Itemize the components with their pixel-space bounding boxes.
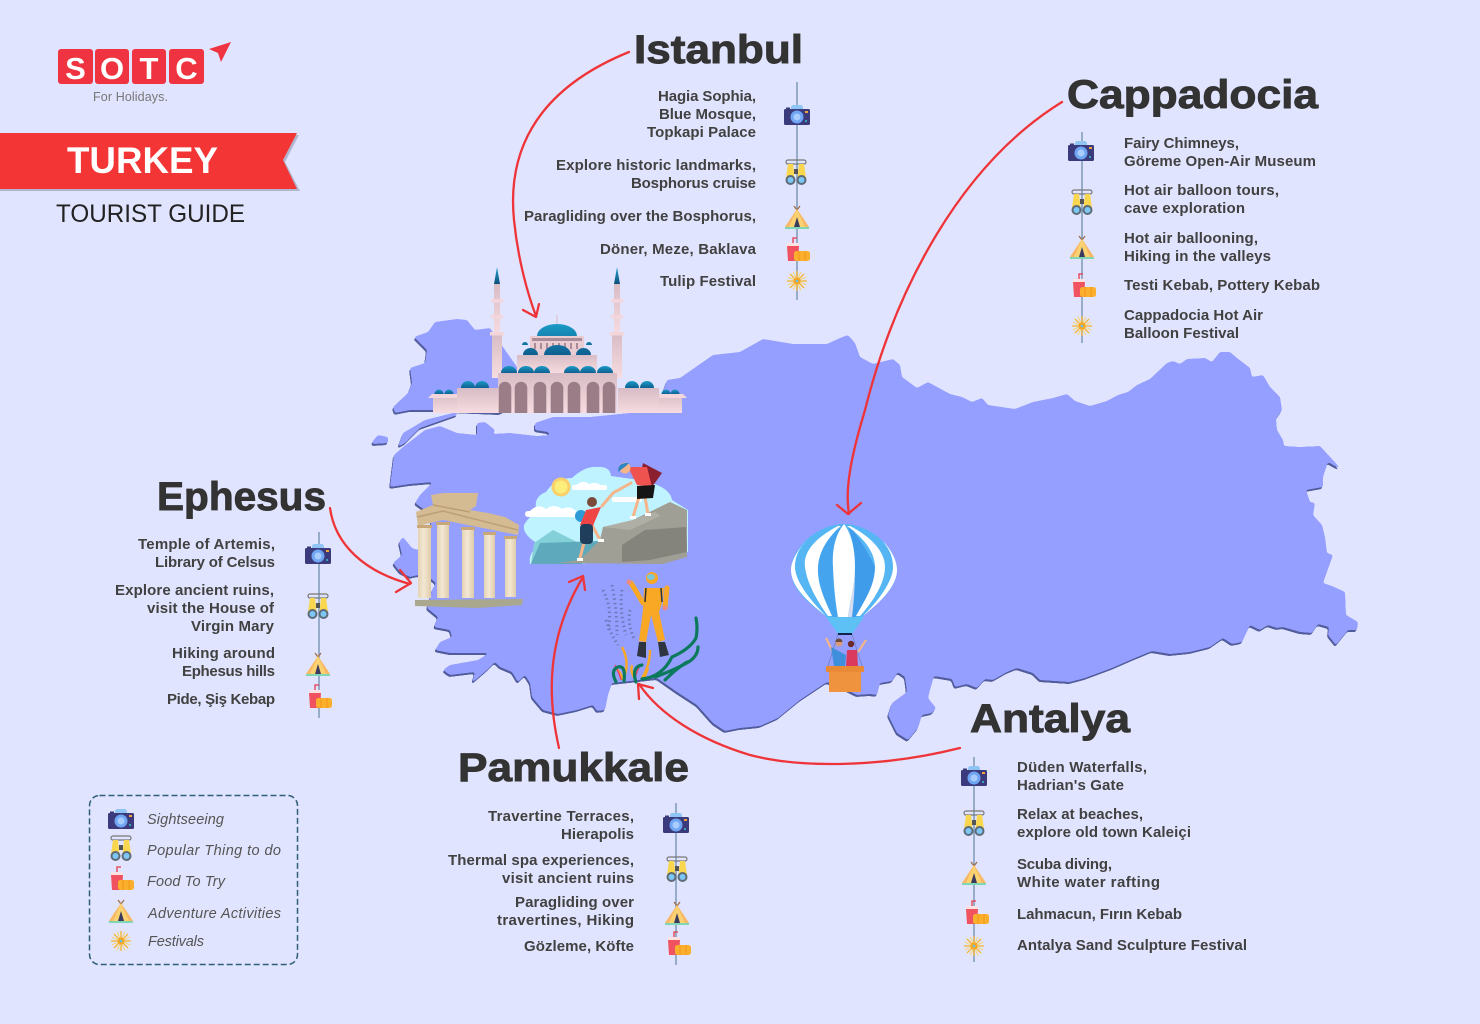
panel: Antalya <box>961 697 1247 962</box>
text: Istanbul details: Paragliding over the Bosphorus, <box>524 208 756 225</box>
subtitle: tourist guide: TOURIST GUIDE <box>56 200 245 228</box>
icon: tent <box>665 902 689 925</box>
text: Antalya details: Lahmacun, Fırın Kebab <box>1017 906 1182 923</box>
icon: camera <box>663 813 689 833</box>
text: Pamukkale details: Hierapolis <box>561 826 634 843</box>
text: Cappadocia details: Cappadocia Hot Air <box>1124 307 1263 324</box>
text: Antalya details: explore old town Kaleiçi <box>1017 824 1191 841</box>
text: Ephesus details: Pide, Şiş Kebap <box>167 691 275 708</box>
icon: food <box>668 932 691 955</box>
legend icon: festival <box>112 932 130 950</box>
panel: Pamukkale <box>448 746 691 965</box>
arrow: Antalya to diver <box>638 684 960 764</box>
icon: binoculars <box>964 811 984 836</box>
text: Istanbul details: Tulip Festival <box>660 273 756 290</box>
text: Antalya details: Düden Waterfalls, <box>1017 759 1147 776</box>
text: Cappadocia details: Hot air balloon tours, <box>1124 182 1279 199</box>
legend icon: camera <box>108 809 134 829</box>
icon: food <box>309 685 332 708</box>
timeline <box>1081 132 1083 343</box>
icon: camera <box>1068 141 1094 161</box>
text: Pamukkale details: Thermal spa experiences, <box>448 852 634 869</box>
logo: SOTC For Holidays <box>58 42 231 104</box>
heading: Antalya: Antalya <box>970 697 1131 741</box>
text: Cappadocia details: Göreme Open-Air Museum <box>1124 153 1316 170</box>
icon: tent <box>1070 236 1094 259</box>
text: Pamukkale details: travertines, Hiking <box>497 912 634 929</box>
icon: camera <box>961 766 987 786</box>
logo: SOTC For Holidays: S <box>65 51 86 86</box>
text: Antalya details <box>1017 759 1247 954</box>
illustration: mosque <box>428 267 687 413</box>
legend <box>90 796 298 964</box>
icon: binoculars <box>786 160 806 185</box>
arrow: Pamukkale to hikers <box>552 576 585 748</box>
text: Ephesus details: Hiking around <box>172 645 275 662</box>
legend label: popular thing to do: Popular Thing to do <box>147 843 281 859</box>
icon: camera <box>784 105 810 125</box>
title banner: Turkey <box>0 133 300 191</box>
arrow: Istanbul to mosque <box>513 52 629 317</box>
icon: tent <box>785 206 809 229</box>
icon: festival <box>788 272 806 290</box>
text: Ephesus details: Ephesus hills <box>182 663 275 680</box>
text: Cappadocia details: cave exploration <box>1124 200 1245 217</box>
text: Ephesus details: Explore ancient ruins, <box>115 582 274 599</box>
timeline <box>973 757 975 962</box>
text: Istanbul details <box>524 88 757 290</box>
text: Pamukkale details: Gözleme, Köfte <box>524 938 634 955</box>
illustration: hikers <box>524 462 688 564</box>
legend label: food to try: Food To Try <box>147 874 226 890</box>
text: Ephesus details: visit the House of <box>147 600 275 617</box>
text: Pamukkale details: Paragliding over <box>515 894 634 911</box>
text: Cappadocia details: Fairy Chimneys, <box>1124 135 1239 152</box>
icon: binoculars <box>308 594 328 619</box>
text: Ephesus details: Temple of Artemis, <box>138 536 275 553</box>
text: Antalya details: White water rafting <box>1017 874 1160 891</box>
text: Istanbul details: Döner, Meze, Baklava <box>600 241 757 258</box>
heading: Cappadocia: Cappadocia <box>1067 73 1319 117</box>
icon: food <box>787 238 810 261</box>
text: Istanbul details: Topkapi Palace <box>647 124 756 141</box>
icon: food <box>966 901 989 924</box>
logo: SOTC For Holidays: For Holidays. <box>93 90 168 104</box>
icon: food <box>1073 274 1096 297</box>
text: Antalya details: Hadrian's Gate <box>1017 777 1124 794</box>
text: Istanbul details: Blue Mosque, <box>659 106 756 123</box>
icon: binoculars <box>1072 190 1092 215</box>
logo: SOTC For Holidays: T <box>140 51 159 86</box>
icon: tent <box>962 862 986 885</box>
heading: Istanbul: Istanbul <box>634 28 803 72</box>
text: Ephesus details: Library of Celsus <box>155 554 275 571</box>
text: Cappadocia details: Hot air ballooning, <box>1124 230 1258 247</box>
text: Ephesus details: Virgin Mary <box>191 618 275 635</box>
legend icon: tent <box>109 900 133 923</box>
arrow: Ephesus to temple <box>330 508 411 592</box>
logo: SOTC For Holidays: C <box>175 51 198 86</box>
legend label: festivals: Festivals <box>148 934 204 950</box>
panel: Istanbul <box>524 28 810 300</box>
timeline <box>796 82 798 300</box>
icon: tent <box>306 653 330 676</box>
illustration: Ephesus temple ruins <box>415 493 523 608</box>
text: Antalya details: Scuba diving, <box>1017 856 1112 873</box>
icon: camera <box>305 544 331 564</box>
text: Antalya details: Relax at beaches, <box>1017 806 1143 823</box>
text: Istanbul details: Bosphorus cruise <box>631 175 756 192</box>
text: Istanbul details: Explore historic landmarks, <box>556 157 756 174</box>
heading: Pamukkale: Pamukkale <box>458 746 689 790</box>
text: Cappadocia details: Testi Kebab, Pottery Kebab <box>1124 277 1320 294</box>
illustration: scuba diver and seaweed <box>603 572 698 682</box>
panel: Ephesus <box>115 475 332 718</box>
logo: SOTC For Holidays: O <box>100 51 124 86</box>
legend label: adventure activities: Adventure Activities <box>147 906 281 922</box>
heading: Ephesus: Ephesus <box>157 475 326 519</box>
text: Pamukkale details: Travertine Terraces, <box>488 808 634 825</box>
legend label: sightseeing: Sightseeing <box>147 812 224 828</box>
legend icon: food <box>111 867 134 890</box>
legend icon: binoculars <box>110 836 132 861</box>
text: Cappadocia details: Balloon Festival <box>1124 325 1239 342</box>
title banner: Turkey: TURKEY <box>67 140 218 181</box>
icon: binoculars <box>666 857 688 882</box>
panel: Cappadocia <box>1067 73 1320 343</box>
illustration: hot air balloon <box>791 524 897 692</box>
text: Cappadocia details: Hiking in the valleys <box>1124 248 1271 265</box>
icon: festival <box>1072 316 1092 336</box>
text: Ephesus details <box>115 536 275 708</box>
arrow: Cappadocia to balloon <box>837 102 1062 514</box>
icon: festival <box>964 936 984 956</box>
timeline <box>675 803 677 965</box>
map of Turkey <box>371 319 1358 742</box>
text: Istanbul details: Hagia Sophia, <box>658 88 756 105</box>
text: Cappadocia details <box>1124 135 1320 342</box>
timeline <box>318 532 320 718</box>
text: Antalya details: Antalya Sand Sculpture Festival <box>1017 937 1247 954</box>
text: Pamukkale details <box>448 808 634 955</box>
text: Pamukkale details: visit ancient ruins <box>502 870 634 887</box>
